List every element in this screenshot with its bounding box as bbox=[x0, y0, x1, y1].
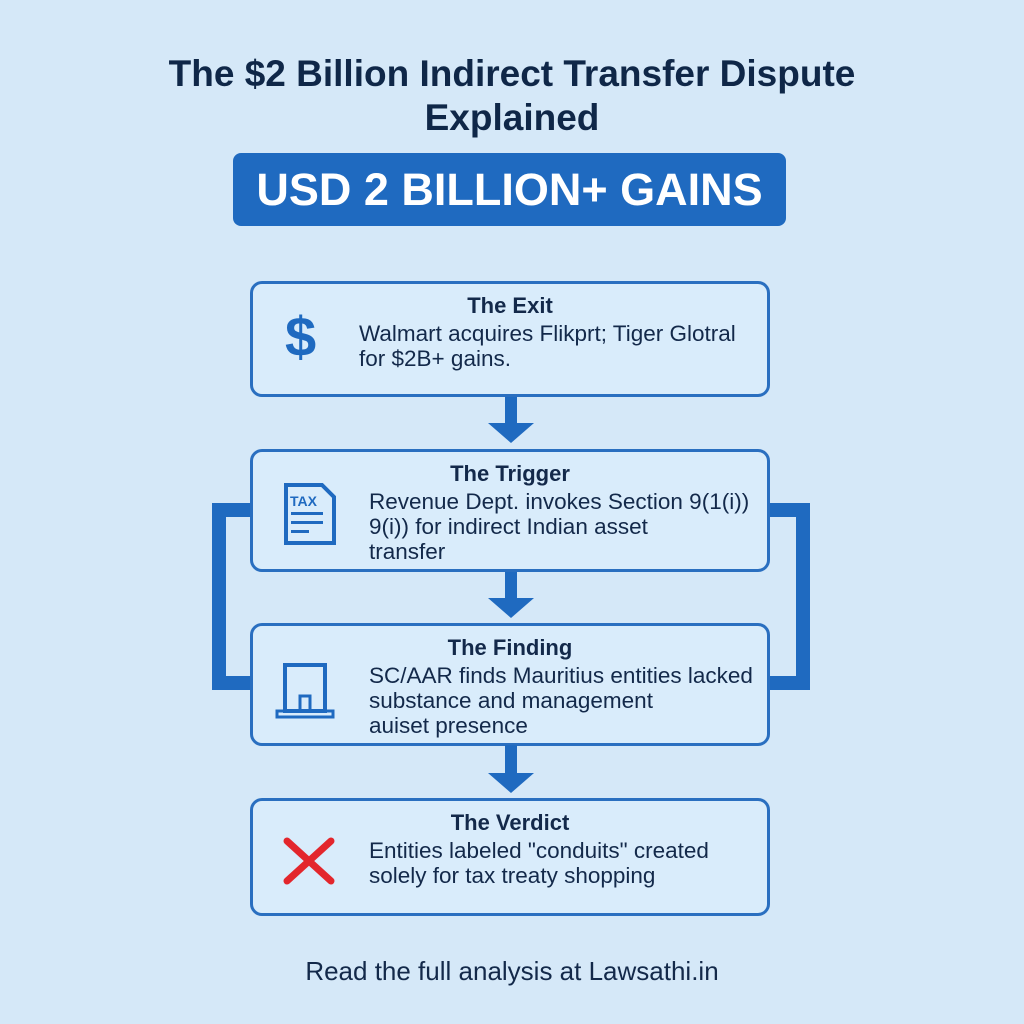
title: The $2 Billion Indirect Transfer Dispute bbox=[169, 53, 855, 94]
text: verdict: Entities labeled "conduits" created bbox=[369, 838, 709, 863]
icon: red x bbox=[284, 838, 334, 884]
bracket left bbox=[212, 503, 250, 690]
text: finding: SC/AAR finds Mauritius entities lacked bbox=[369, 663, 753, 688]
text: exit: Walmart acquires Flikprt; Tiger Glotral bbox=[359, 321, 736, 346]
icon: dollar: $ bbox=[285, 305, 316, 368]
footer: Read the full analysis at Lawsathi.in bbox=[305, 956, 719, 986]
heading: the trigger: The Trigger bbox=[450, 461, 570, 486]
panel: the finding bbox=[250, 623, 770, 746]
arrow 2 bbox=[488, 572, 534, 618]
text: exit bbox=[359, 321, 736, 371]
text: trigger: 9(i)) for indirect Indian asset bbox=[369, 514, 648, 539]
text: finding: substance and management bbox=[369, 688, 653, 713]
text: trigger: transfer bbox=[369, 539, 445, 564]
text: trigger: Revenue Dept. invokes Section 9(1(i)) bbox=[369, 489, 749, 514]
banner: USD 2 BILLION+ GAINS bbox=[256, 164, 763, 215]
banner bbox=[233, 153, 786, 226]
arrow 3 bbox=[488, 745, 534, 793]
heading: the exit: The Exit bbox=[467, 293, 553, 318]
panel: the verdict bbox=[250, 798, 770, 916]
heading: the finding: The Finding bbox=[448, 635, 572, 660]
icon: building bbox=[276, 663, 334, 718]
heading: the verdict: The Verdict bbox=[451, 810, 569, 835]
text: verdict bbox=[369, 838, 709, 888]
text: finding bbox=[369, 663, 753, 738]
arrow 1 bbox=[488, 397, 534, 443]
text: exit: for $2B+ gains. bbox=[359, 346, 511, 371]
bracket right bbox=[770, 503, 810, 690]
icon: tax document bbox=[284, 483, 336, 545]
title: Explained bbox=[425, 97, 599, 138]
panel: the exit bbox=[250, 281, 770, 397]
text: finding: auiset presence bbox=[369, 713, 528, 738]
title bbox=[169, 53, 855, 138]
text: trigger bbox=[369, 489, 749, 564]
icon: tax document: TAX bbox=[290, 493, 318, 509]
panel: the trigger bbox=[250, 449, 770, 572]
text: verdict: solely for tax treaty shopping bbox=[369, 863, 655, 888]
